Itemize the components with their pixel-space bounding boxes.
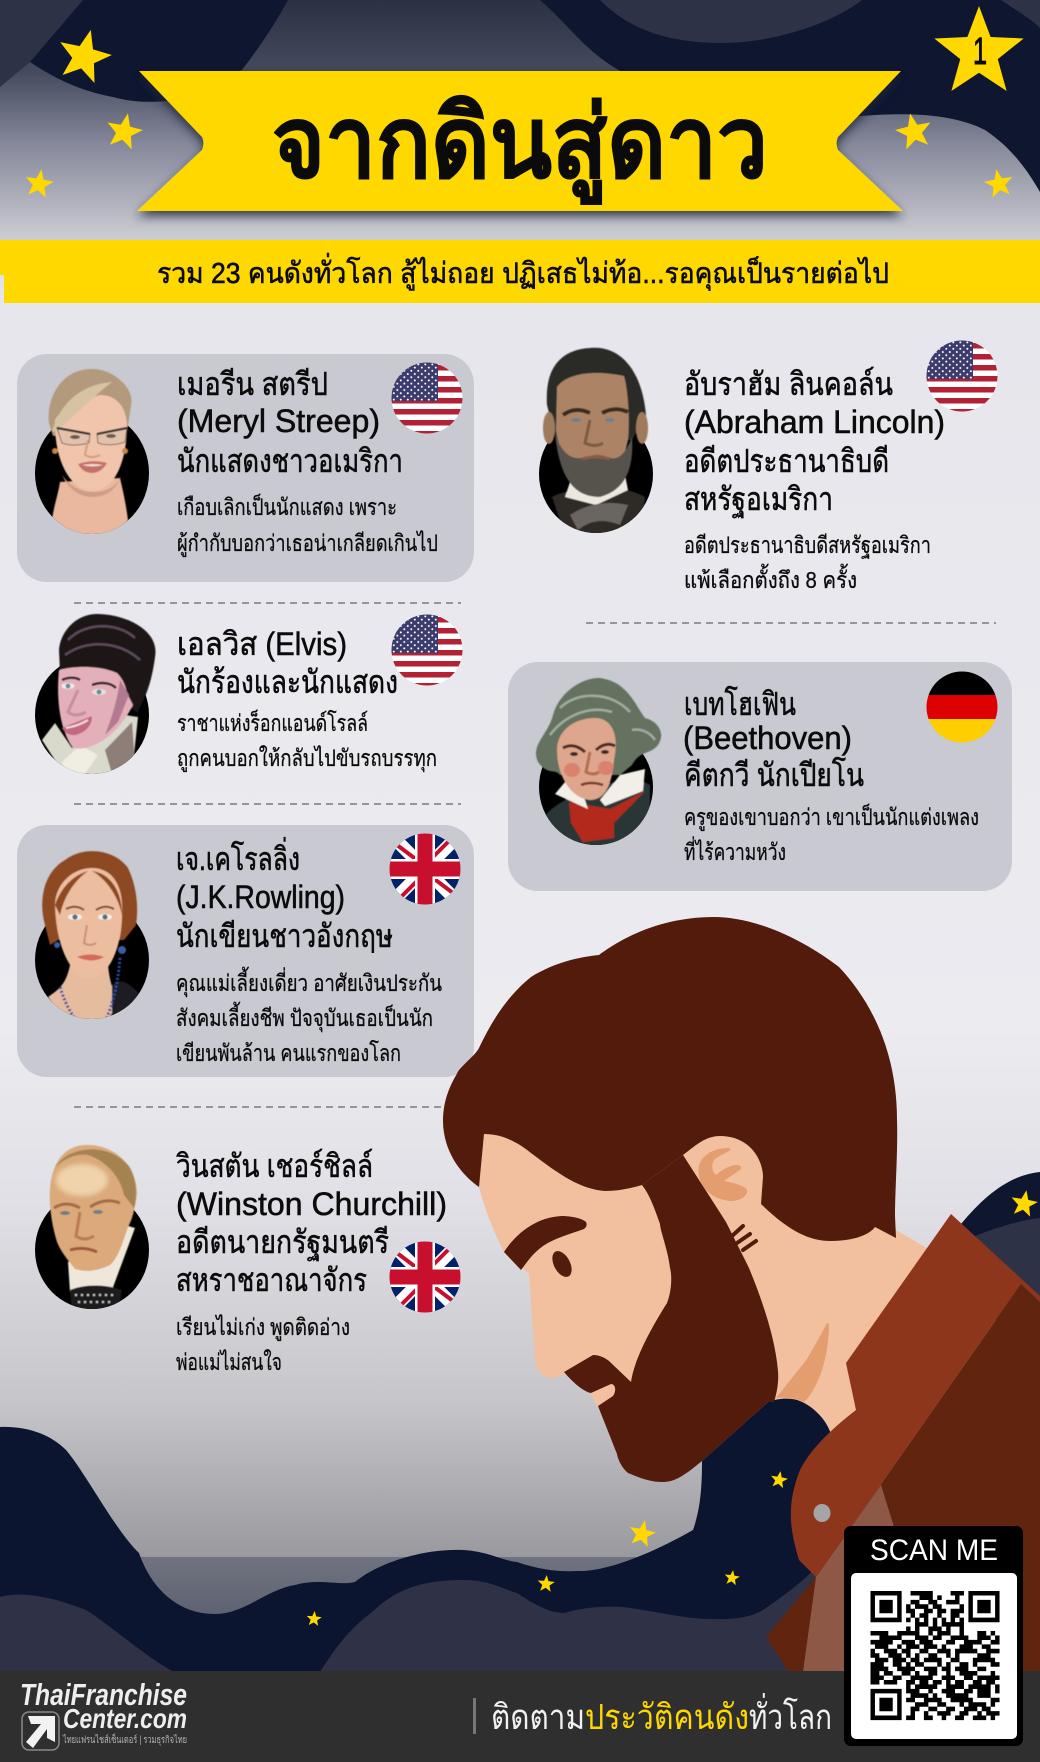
text: Elvis: นักร้องและนักแสดง xyxy=(177,664,398,700)
text: Winston Churchill: วินสตัน เชอร์ชิลล์ xyxy=(176,1148,373,1184)
icon: US flag xyxy=(391,362,463,436)
text: Winston Churchill: พ่อแม่ไม่สนใจ xyxy=(176,1349,282,1375)
man illustration: eyebrow xyxy=(504,1216,587,1270)
text: Beethoven xyxy=(683,686,979,865)
man illustration: hair ticks xyxy=(732,1226,756,1250)
title: จากดินสู่ดาว xyxy=(272,87,768,203)
text: J.K. Rowling: นักเขียนชาวอังกฤษ xyxy=(176,918,393,954)
background horizon band xyxy=(0,1557,1040,1672)
bottom stars xyxy=(306,1470,789,1626)
text: Beethoven: เบทโฮเฟิน xyxy=(684,686,796,722)
jacket xyxy=(766,1214,1040,1672)
panel: Meryl Streep xyxy=(17,354,474,582)
text: Winston Churchill: เรียนไม่เก่ง พูดติดอ่าง xyxy=(176,1314,350,1341)
text: Meryl Streep xyxy=(177,366,438,557)
logo: ThaiFranchise xyxy=(20,1677,187,1712)
icon: US flag xyxy=(391,614,463,688)
text: Elvis: ราชาแห่งร็อกแอนด์โรลล์ xyxy=(177,708,368,736)
QR card xyxy=(844,1526,1023,1746)
man illustration: neck shadow xyxy=(776,1323,829,1402)
man illustration: eye xyxy=(548,1248,576,1280)
man illustration: hair xyxy=(443,917,897,1241)
divider xyxy=(74,1106,445,1108)
logo xyxy=(20,1677,187,1750)
text: Abraham Lincoln: อดีตประธานาธิบดี xyxy=(684,443,889,479)
footer slogan: ติดตาม xyxy=(491,1698,585,1737)
divider xyxy=(74,602,461,604)
text: Meryl Streep: ผู้กำกับบอกว่าเธอน่าเกลียดเกินไป xyxy=(177,530,438,557)
portrait: Abraham Lincoln xyxy=(539,348,653,535)
text: Abraham Lincoln: อับราฮัม ลินคอล์น xyxy=(684,366,893,402)
portrait: Meryl Streep xyxy=(35,369,149,540)
title ribbon xyxy=(137,71,903,211)
text: Abraham Lincoln xyxy=(684,366,945,593)
icon: UK flag xyxy=(389,833,461,905)
man illustration: beard xyxy=(564,1155,778,1482)
footer slogan: ทั่วโลก xyxy=(749,1693,832,1737)
jacket button xyxy=(814,1504,830,1522)
text: Meryl Streep: เมอรีน สตรีป xyxy=(177,366,328,402)
panel: Elvis xyxy=(35,614,463,776)
text: Abraham Lincoln: แพ้เลือกตั้งถึง 8 ครั้ง xyxy=(684,564,857,593)
subtitle bar: รวม 23 คนดังทั่วโลก สู้ไม่ถอย ปฏิเสธไม่ท้อ...รอคุณเป็นรายต่อไป xyxy=(157,253,889,291)
footer bar xyxy=(0,1671,1040,1762)
top left wave shapes xyxy=(0,0,288,102)
icon: logo arrow xyxy=(22,1712,59,1750)
background page gradient xyxy=(0,240,1040,1562)
text: J.K. Rowling: คุณแม่เลี้ยงเดี่ยว อาศัยเงินประกัน xyxy=(176,967,442,997)
text: Abraham Lincoln: สหรัฐอเมริกา xyxy=(684,481,833,519)
text: Winston Churchill: (Winston Churchill) xyxy=(176,1186,447,1222)
background top gradient xyxy=(0,0,1040,240)
logo: ไทยแฟรนไชส์เซ็นเตอร์ | รวมธุรกิจไทย xyxy=(62,1732,187,1746)
page number star: 1 xyxy=(973,31,987,73)
text: Beethoven: คีตกวี นักเปียโน xyxy=(684,757,864,793)
text: Abraham Lincoln: (Abraham Lincoln) xyxy=(684,404,945,440)
text: Winston Churchill xyxy=(176,1148,447,1375)
text: Beethoven: (Beethoven) xyxy=(683,720,852,756)
top right wave shapes xyxy=(540,0,1040,192)
text: J.K. Rowling: เขียนพันล้าน คนแรกของโลก xyxy=(176,1040,401,1066)
portrait: Beethoven xyxy=(536,678,661,850)
icon: German flag xyxy=(926,671,998,743)
small bird xyxy=(38,1462,56,1470)
portrait: J.K. Rowling xyxy=(35,851,149,1024)
page number star xyxy=(934,6,1024,91)
man illustration: neck and face xyxy=(479,1130,930,1440)
text: Elvis: เอลวิส (Elvis) xyxy=(177,626,347,662)
right navy wave xyxy=(961,1172,1040,1320)
text: Elvis xyxy=(177,626,437,772)
text: Beethoven: ที่ไร้ความหวัง xyxy=(684,836,786,865)
footer divider xyxy=(473,1698,476,1734)
footer slogan xyxy=(491,1693,832,1737)
text: J.K. Rowling: สังคมเลี้ยงชีพ ปัจจุบันเธอเป็นนัก xyxy=(176,1002,433,1032)
text: Meryl Streep: (Meryl Streep) xyxy=(177,403,380,439)
text: J.K. Rowling: เจ.เคโรลลิ่ง xyxy=(176,837,300,877)
text: Winston Churchill: อดีตนายกรัฐมนตรี xyxy=(176,1224,389,1262)
portrait: Winston Churchill xyxy=(35,1145,149,1312)
panel: Abraham Lincoln xyxy=(539,340,998,593)
logo: Center.com xyxy=(63,1703,187,1734)
footer slogan: ประวัติคนดัง xyxy=(585,1698,749,1737)
decorative top stars xyxy=(23,23,1015,198)
bottom dark waves xyxy=(0,1567,830,1672)
text: Meryl Streep: นักแสดงชาวอเมริกา xyxy=(177,443,403,479)
icon: US flag xyxy=(926,340,998,414)
bottom navy wave xyxy=(0,1399,880,1672)
panel: J.K. Rowling xyxy=(17,825,474,1077)
text: J.K. Rowling xyxy=(176,837,442,1066)
portrait: Elvis xyxy=(35,614,155,776)
divider xyxy=(74,803,461,805)
text: Elvis: ถูกคนบอกให้กลับไปขับรถบรรทุก xyxy=(177,745,437,772)
QR code xyxy=(870,1593,1000,1718)
panel: Winston Churchill xyxy=(35,1145,461,1375)
text: Abraham Lincoln: อดีตประธานาธิบดีสหรัฐอเมริกา xyxy=(684,532,931,559)
text: Winston Churchill: สหราชอาณาจักร xyxy=(176,1262,367,1298)
divider xyxy=(586,622,996,624)
icon: UK flag xyxy=(389,1241,461,1313)
text: J.K. Rowling: (J.K.Rowling) xyxy=(176,879,345,915)
panel: Beethoven xyxy=(508,662,1012,891)
man illustration: ear detail xyxy=(698,1148,747,1201)
subtitle bar xyxy=(0,240,1040,303)
text: Meryl Streep: เกือบเลิกเป็นนักแสดง เพราะ xyxy=(177,492,397,520)
scan me label: SCAN ME xyxy=(870,1534,998,1567)
